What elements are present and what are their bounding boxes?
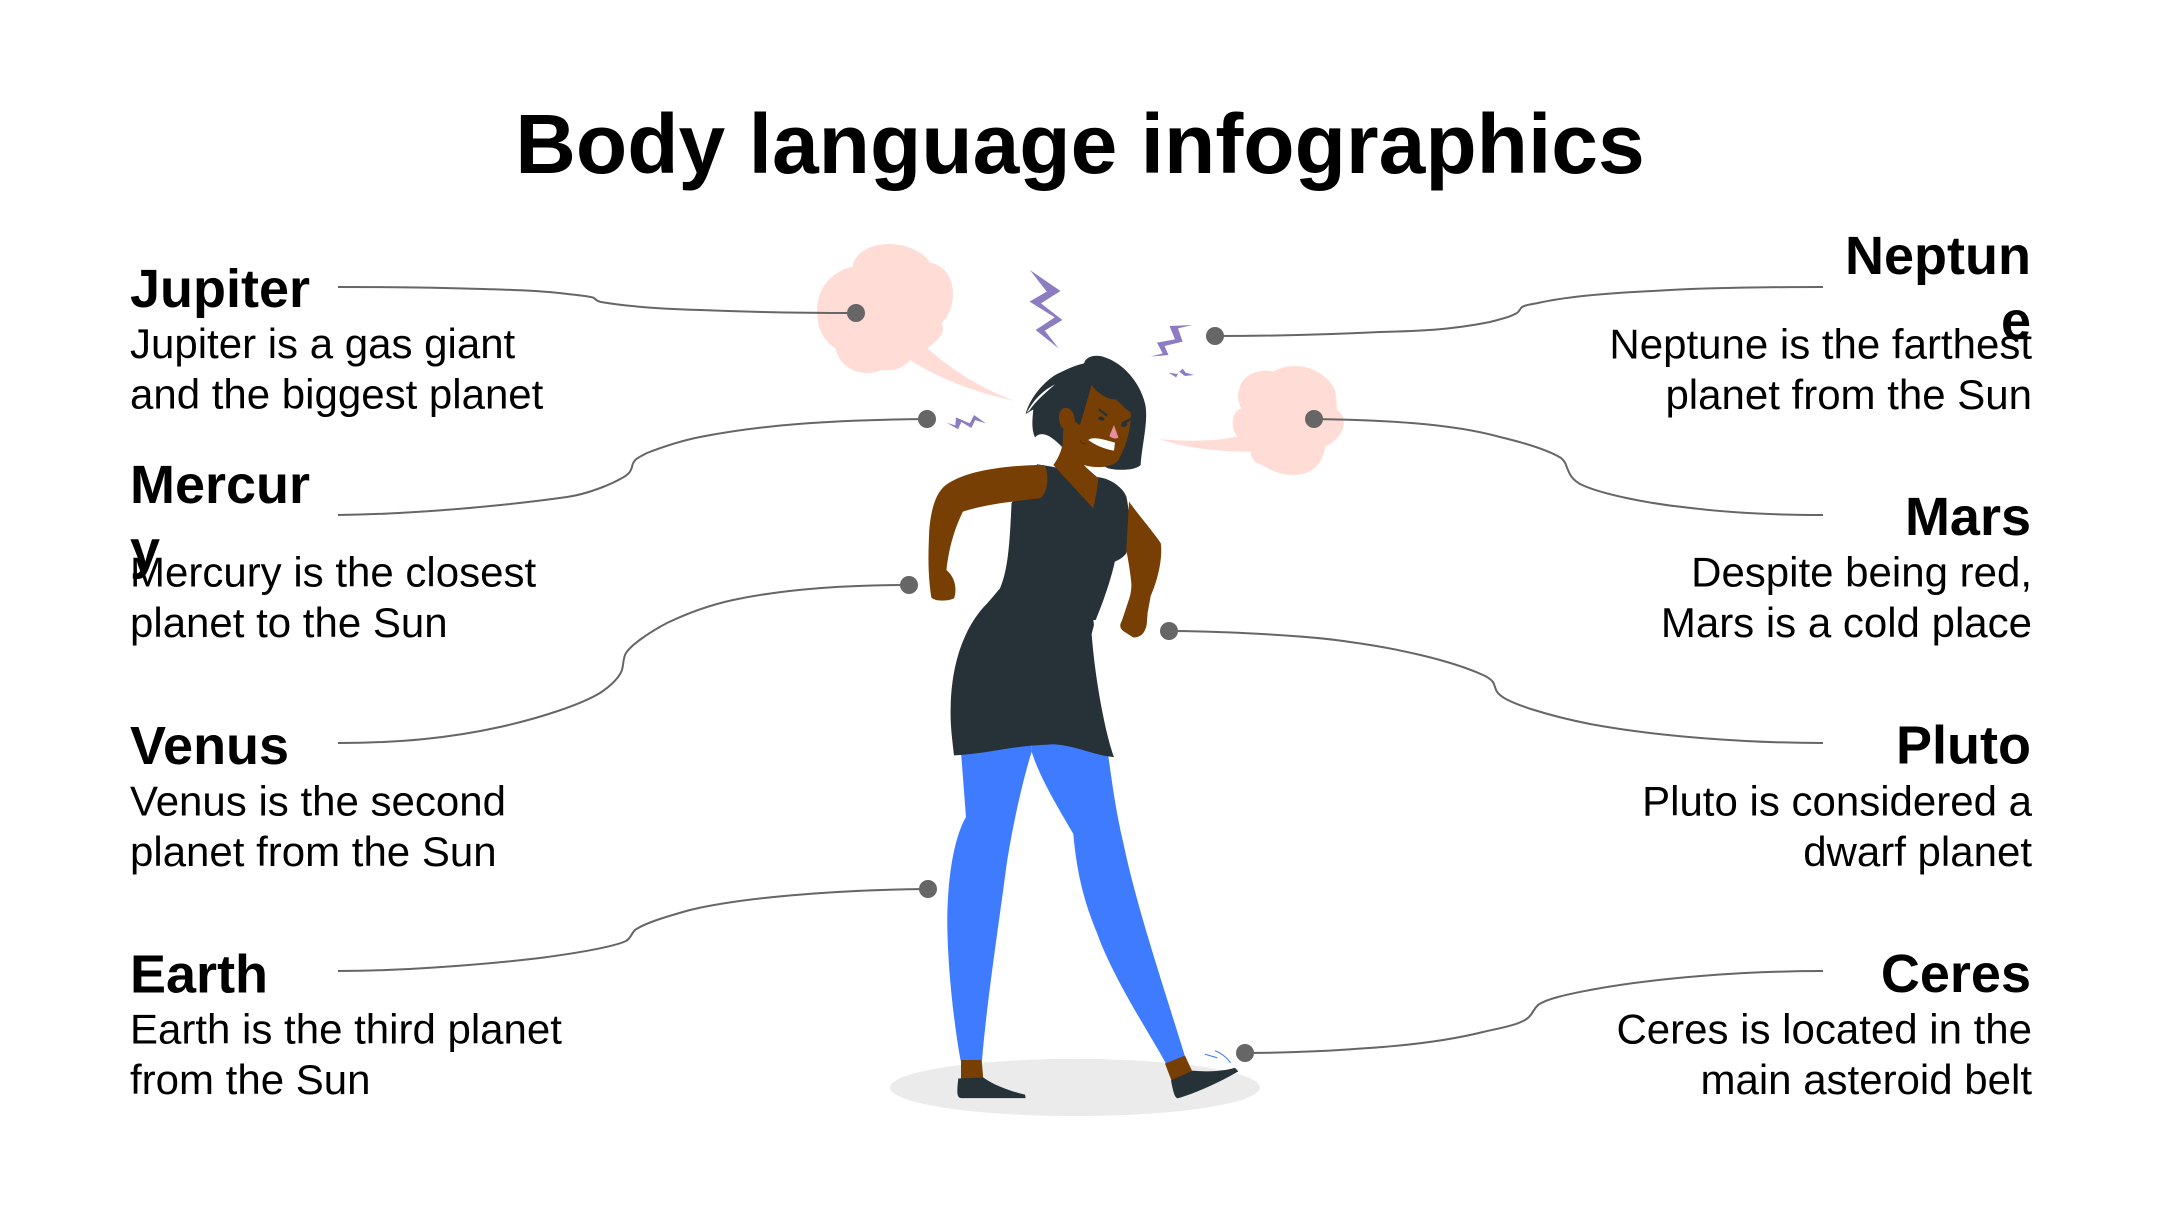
description: Jupiter: Jupiter is a gas giant (130, 320, 516, 367)
heading: Mars: Mars (1905, 487, 2031, 547)
heading: Ceres: Ceres (1881, 944, 2031, 1004)
heading: Venus: Venus (130, 716, 289, 776)
connector: Mercury (338, 410, 936, 515)
right smoke cloud (1159, 366, 1344, 475)
connector: Neptune (1206, 287, 1823, 345)
connector: Mars (1305, 410, 1823, 515)
lower body and legs (947, 596, 1238, 1098)
connector: Pluto (1160, 622, 1823, 743)
head (1026, 356, 1146, 508)
heading: Mercury (wrapped): Mercur (130, 455, 310, 515)
teeth (1088, 438, 1115, 451)
heading: Neptune (wrapped): e (2001, 291, 2031, 351)
description: Pluto: Pluto is considered a (1642, 778, 2033, 824)
heading: Pluto: Pluto (1896, 716, 2031, 776)
text block: Neptune (1609, 226, 2032, 418)
right hand (1120, 596, 1151, 637)
small lightning bolt left (946, 415, 986, 429)
raised left arm (928, 465, 1047, 601)
hair highlight (1027, 384, 1055, 413)
description: Venus: planet from the Sun (130, 828, 497, 875)
description: Earth: from the Sun (130, 1056, 370, 1103)
eyes and brows (1098, 408, 1131, 427)
title: Body language infographics (515, 97, 1645, 191)
text block: Ceres (1616, 944, 2032, 1103)
left leg (947, 743, 1032, 1061)
hair (1026, 356, 1146, 470)
heading: Neptune (wrapped): Neptun (1845, 226, 2031, 286)
description: Pluto: dwarf planet (1803, 828, 2032, 875)
large lightning bolt (1030, 270, 1062, 348)
connector: Jupiter (338, 287, 865, 322)
heading: Earth: Earth (130, 944, 268, 1004)
heading: Mercury (wrapped): y (130, 520, 160, 580)
description: Mercury: planet to the Sun (130, 599, 448, 646)
connector: Earth (338, 880, 937, 971)
left shoe (957, 1077, 1026, 1098)
text block: Jupiter (130, 259, 544, 417)
illustration: angry woman walking (817, 244, 1344, 1116)
description: Neptune: planet from the Sun (1665, 371, 2032, 418)
nose (1109, 425, 1118, 438)
description: Neptune: Neptune is the farthest (1609, 320, 2032, 368)
medium lightning bolt (1150, 325, 1193, 357)
left ankle (961, 1060, 983, 1079)
left smoke cloud (817, 244, 1015, 401)
mouth crease (1080, 440, 1086, 444)
text block: Pluto (1642, 716, 2033, 875)
connector: Venus (338, 576, 918, 743)
right arm (1122, 502, 1161, 623)
heading: Jupiter: Jupiter (130, 259, 310, 319)
skirt (951, 599, 1114, 757)
right ankle (1165, 1056, 1193, 1081)
right shoe (1171, 1068, 1238, 1098)
description: Venus: Venus is the second (130, 778, 506, 824)
motion lines (1205, 1051, 1231, 1063)
right leg (1032, 743, 1185, 1064)
face and neck (1053, 385, 1131, 508)
connector: Ceres (1236, 971, 1823, 1062)
description: Mercury: Mercury is the closest (130, 548, 536, 596)
description: Mars: Mars is a cold place (1661, 599, 2032, 646)
description: Mars: Despite being red, (1691, 548, 2032, 596)
ground shadow (890, 1059, 1260, 1116)
small lightning bolt right (1168, 369, 1194, 377)
text block: Venus (130, 716, 506, 875)
description: Jupiter: and the biggest planet (130, 370, 544, 417)
dress bodice (975, 464, 1129, 620)
text block: Earth (130, 944, 562, 1103)
text block: Mars (1661, 487, 2032, 646)
description: Earth: Earth is the third planet (130, 1006, 562, 1052)
text block: Mercury (130, 455, 536, 646)
description: Ceres: Ceres is located in the (1616, 1006, 2032, 1052)
smoke, lightning, torso and arms (817, 244, 1344, 623)
description: Ceres: main asteroid belt (1700, 1056, 2032, 1103)
